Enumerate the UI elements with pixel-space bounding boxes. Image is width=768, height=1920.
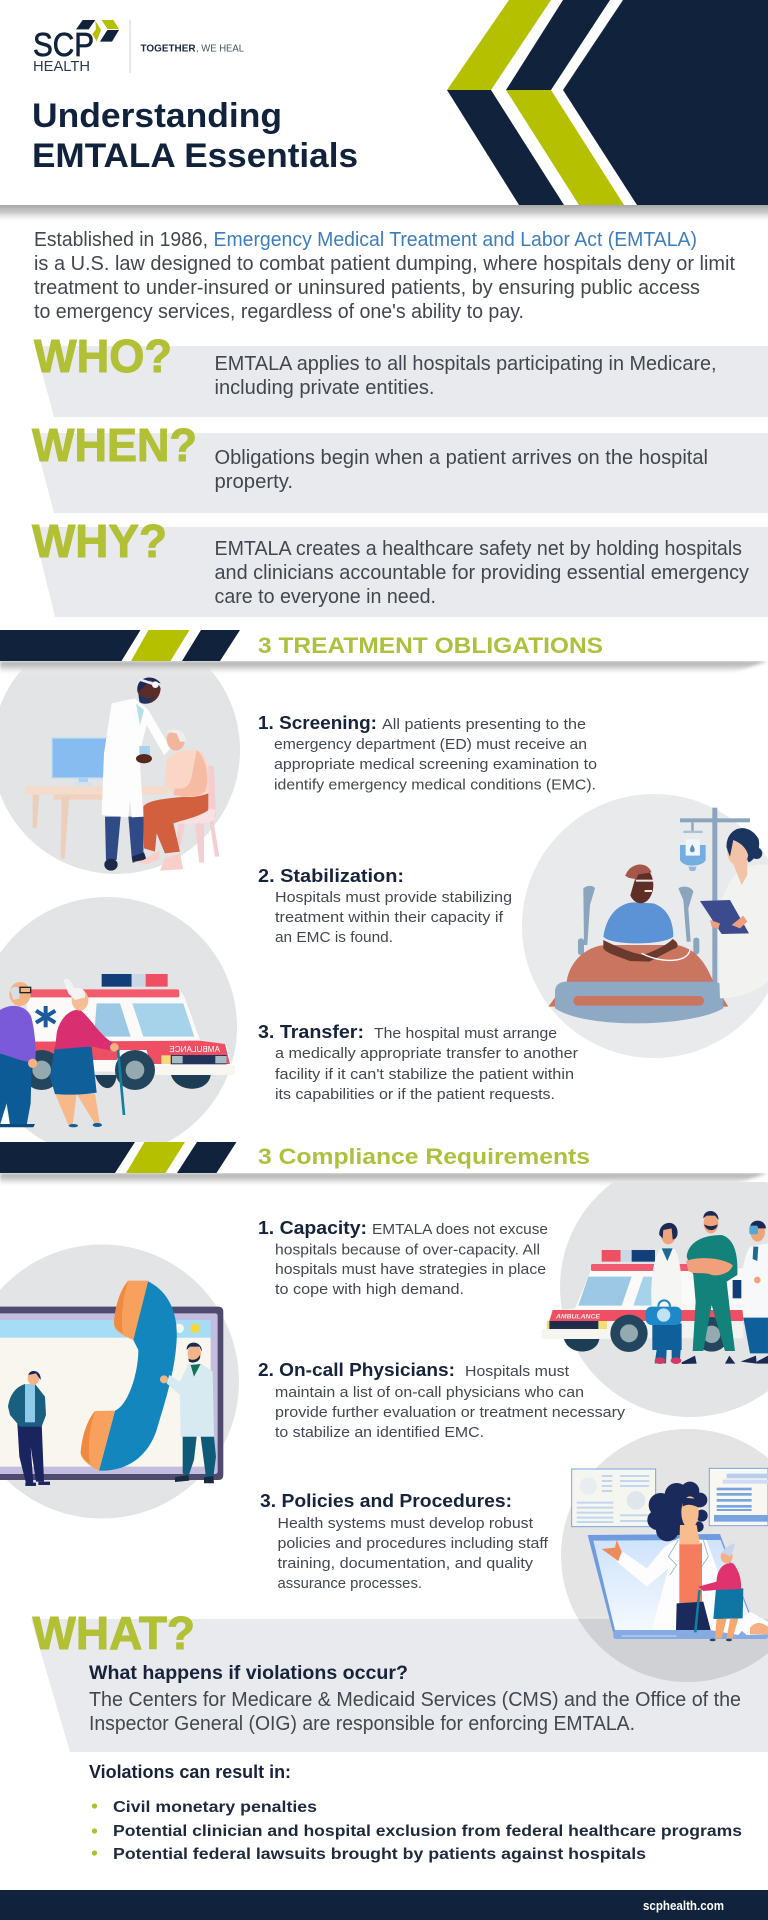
intro paragraph: treatment to under-insured or uninsured patients, by ensuring public access bbox=[34, 277, 700, 299]
illustration: doctor emerging from laptop bbox=[561, 1429, 768, 1682]
text: policies and procedures: assurance processes. bbox=[278, 1575, 422, 1592]
intro paragraph bbox=[34, 229, 735, 323]
title bbox=[32, 97, 358, 175]
text: on-call physicians bbox=[258, 1360, 626, 1441]
text: screening: appropriate medical screening examination to bbox=[274, 756, 597, 773]
text: why: and clinicians accountable for providing essential emergency bbox=[214, 562, 749, 584]
text: capacity: to cope with high demand. bbox=[275, 1281, 464, 1298]
heading: what: WHAT? bbox=[32, 1607, 195, 1659]
footer bar: scphealth.com bbox=[643, 1898, 724, 1913]
text: who: EMTALA applies to all hospitals participating in Medicare, bbox=[214, 353, 716, 375]
text: what happens if violations occur: The Centers for Medicare & Medicaid Services (CMS) and the Office of the bbox=[89, 1689, 741, 1711]
panel: when bbox=[32, 419, 768, 513]
logo: SCP Health: SCP bbox=[33, 26, 94, 63]
text: on-call physicians: 2. On-call Physicians: bbox=[258, 1360, 455, 1380]
text: capacity: EMTALA does not excuse bbox=[372, 1221, 548, 1238]
text: transfer: facility if it can't stabilize the patient within bbox=[275, 1066, 574, 1083]
logo: SCP Health: , WE HEAL bbox=[196, 42, 244, 54]
illustration: ambulance and medical team: AMBULANCE bbox=[555, 1313, 601, 1320]
intro paragraph: Emergency Medical Treatment and Labor Act (EMTALA) bbox=[214, 229, 697, 251]
illustration: ambulance and elderly couple bbox=[0, 897, 237, 1157]
section banner: 3 treatment obligations bbox=[0, 630, 768, 675]
text: stabilization: treatment within their capacity if bbox=[275, 909, 504, 926]
text: on-call physicians: Hospitals must bbox=[465, 1363, 570, 1380]
text: policies and procedures: Health systems must develop robust bbox=[278, 1515, 534, 1532]
text: violations list: Violations can result in: bbox=[89, 1762, 291, 1782]
illustration: patient in hospital bed bbox=[522, 794, 768, 1058]
illustration: ambulance and elderly couple: AMBULANCE bbox=[169, 1044, 220, 1054]
text: screening: 1. Screening: bbox=[258, 713, 377, 733]
footer bar bbox=[0, 1890, 768, 1920]
text: policies and procedures: training, documentation, and quality bbox=[278, 1555, 534, 1572]
panel: who bbox=[34, 330, 768, 417]
list item: civil penalties: Civil monetary penalties bbox=[113, 1799, 317, 1816]
text: who: including private entities. bbox=[214, 377, 434, 399]
text: capacity bbox=[258, 1218, 548, 1298]
text: capacity: hospitals because of over-capacity. All bbox=[275, 1242, 540, 1258]
text: transfer: 3. Transfer: bbox=[258, 1022, 364, 1042]
text: stabilization: 2. Stabilization: bbox=[258, 866, 404, 886]
intro paragraph: to emergency services, regardless of one's ability to pay. bbox=[34, 301, 524, 323]
text: when: property. bbox=[214, 471, 293, 493]
text: capacity: hospitals must have strategies in place bbox=[275, 1261, 546, 1278]
text: what happens if violations occur: What happens if violations occur? bbox=[89, 1663, 408, 1684]
text: what happens if violations occur bbox=[89, 1663, 741, 1735]
text: transfer: its capabilities or if the patient requests. bbox=[275, 1086, 555, 1103]
list item: exclusion: Potential clinician and hospital exclusion from federal healthcare programs bbox=[113, 1823, 742, 1840]
icon: logo mark bbox=[76, 20, 119, 42]
logo: SCP Health: TOGETHER bbox=[140, 42, 196, 54]
intro paragraph: Established in 1986, bbox=[34, 229, 208, 251]
text: stabilization bbox=[258, 866, 512, 946]
title: EMTALA Essentials bbox=[32, 137, 358, 175]
text: screening bbox=[258, 713, 597, 794]
header chevron graphic bbox=[447, 0, 768, 205]
illustration: doctor screening patient bbox=[0, 670, 240, 874]
text: screening: All patients presenting to the bbox=[382, 716, 586, 733]
text: stabilization: an EMC is found. bbox=[275, 929, 393, 946]
text: on-call physicians: maintain a list of on-call physicians who can bbox=[275, 1384, 584, 1401]
text: screening: identify emergency medical conditions (EMC). bbox=[274, 776, 596, 794]
panel: why bbox=[32, 515, 768, 617]
logo: SCP Health: HEALTH bbox=[33, 58, 90, 75]
text: why: care to everyone in need. bbox=[214, 586, 436, 608]
heading: treatment obligations: 3 TREATMENT OBLIGATIONS bbox=[258, 633, 603, 658]
text: capacity: 1. Capacity: bbox=[258, 1218, 367, 1238]
text: what happens if violations occur: Inspector General (OIG) are responsible for enforcing EMTALA. bbox=[89, 1713, 635, 1735]
text: policies and procedures: 3. Policies and Procedures: bbox=[260, 1491, 512, 1511]
text: who bbox=[214, 353, 716, 399]
logo: SCP Health bbox=[33, 20, 244, 75]
heading: when: WHEN? bbox=[32, 419, 197, 471]
text: policies and procedures: policies and procedures including staff bbox=[278, 1535, 549, 1552]
heading: why: WHY? bbox=[32, 515, 167, 567]
text: violations list bbox=[89, 1762, 742, 1863]
text: screening: emergency department (ED) must receive an bbox=[274, 736, 587, 753]
text: policies and procedures bbox=[260, 1491, 549, 1592]
title: Understanding bbox=[32, 97, 282, 135]
list item: lawsuits: Potential federal lawsuits brought by patients against hospitals bbox=[113, 1846, 646, 1863]
text: stabilization: Hospitals must provide stabilizing bbox=[275, 889, 512, 906]
text: transfer: The hospital must arrange bbox=[374, 1025, 557, 1042]
heading: who: WHO? bbox=[34, 330, 172, 382]
intro paragraph: is a U.S. law designed to combat patient dumping, where hospitals deny or limit bbox=[34, 253, 735, 275]
text: on-call physicians: to stabilize an identified EMC. bbox=[275, 1424, 484, 1441]
text: transfer: a medically appropriate transfer to another bbox=[275, 1045, 578, 1062]
illustration: giant phone and doctor on screen bbox=[0, 1244, 239, 1518]
illustration: ambulance and medical team bbox=[542, 1157, 768, 1417]
text: why bbox=[214, 538, 749, 608]
text: why: EMTALA creates a healthcare safety net by holding hospitals bbox=[214, 538, 742, 560]
panel: what bbox=[31, 1607, 768, 1752]
text: when: Obligations begin when a patient arrives on the hospital bbox=[214, 447, 708, 469]
text: transfer bbox=[258, 1022, 578, 1103]
text: when bbox=[214, 447, 708, 493]
heading: compliance requirements: 3 Compliance Requirements bbox=[258, 1144, 590, 1169]
text: on-call physicians: provide further evaluation or treatment necessary bbox=[275, 1404, 626, 1421]
section banner: 3 compliance requirements bbox=[0, 1142, 768, 1187]
